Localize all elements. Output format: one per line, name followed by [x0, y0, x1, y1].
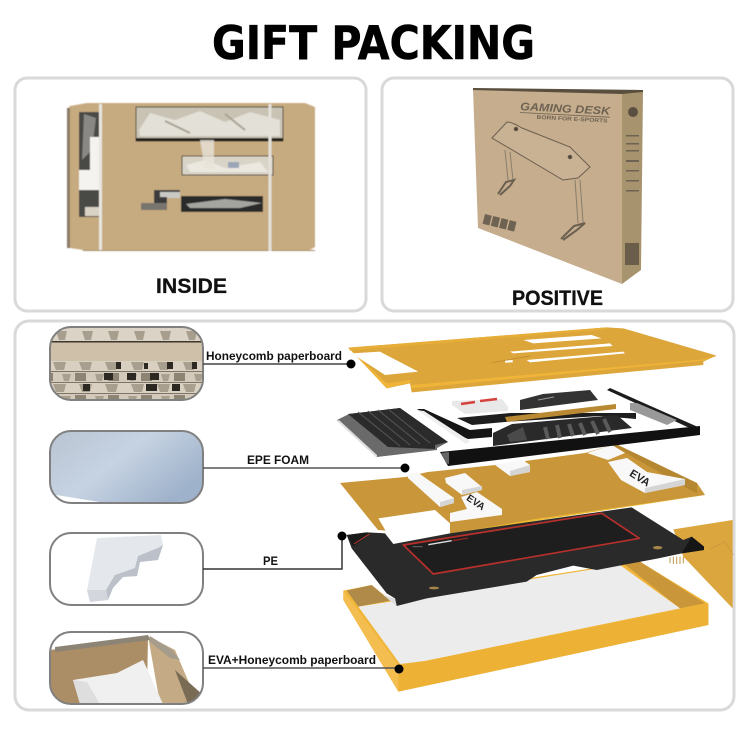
- carton side marks: [625, 107, 639, 265]
- panel: inside: [15, 78, 366, 311]
- black desktop: [347, 507, 704, 606]
- thumbnail: honeycomb paperboard: [50, 327, 203, 400]
- panel: materials: [15, 321, 734, 710]
- right edge carton board: [670, 520, 733, 608]
- title: GIFT PACKING: [212, 16, 535, 70]
- front beam: [440, 426, 700, 466]
- carton handling icons: [483, 214, 517, 232]
- panel: positive: [382, 78, 733, 311]
- center plate: [493, 415, 632, 446]
- foam blocks: [407, 445, 685, 522]
- carton heading: [519, 101, 612, 125]
- exploded view: right edge board, tray and desktop: [343, 507, 733, 692]
- callout: honeycomb paperboard: [203, 349, 356, 368]
- thumbnail: PE corner: [50, 533, 203, 605]
- white foam block: [378, 510, 450, 544]
- callout: PE: [203, 532, 346, 569]
- callout: EPE foam: EPE FOAM: [247, 453, 309, 467]
- callout: EPE foam: [203, 453, 410, 472]
- carton desk drawing: [492, 122, 590, 240]
- carton heading: GAMING DESK: [520, 101, 612, 118]
- wood bar: [505, 404, 616, 422]
- layer: EVA board with foam blocks: [340, 445, 705, 536]
- layer: black frame and hardware: [337, 388, 700, 466]
- photo: closed carton front: [473, 88, 643, 284]
- motor housing: [520, 390, 598, 410]
- thumbnail: EPE foam: [50, 431, 203, 503]
- layer: top yellow board: [348, 327, 717, 392]
- label: positive: POSITIVE: [512, 287, 603, 310]
- carton heading: BORN FOR E-SPORTS: [536, 115, 608, 125]
- callout: honeycomb paperboard: Honeycomb paperboard: [206, 349, 342, 363]
- callout: PE: PE: [263, 554, 278, 568]
- thumbnail: EVA + honeycomb paperboard: [50, 632, 203, 704]
- label: inside: INSIDE: [156, 275, 227, 298]
- printed box: [452, 399, 508, 414]
- bottom tray: [343, 562, 708, 692]
- rails: [607, 388, 698, 430]
- ribbed leg tray: [337, 408, 448, 458]
- foam block label: EVA right: EVA: [627, 468, 652, 489]
- photo: open carton with cut-out windows: [67, 103, 315, 251]
- callout: EVA + honeycomb paperboard: EVA+Honeycomb paperboard: [208, 653, 376, 667]
- callout: EVA + honeycomb paperboard: [203, 653, 404, 674]
- foam block label: EVA left: EVA: [464, 493, 487, 513]
